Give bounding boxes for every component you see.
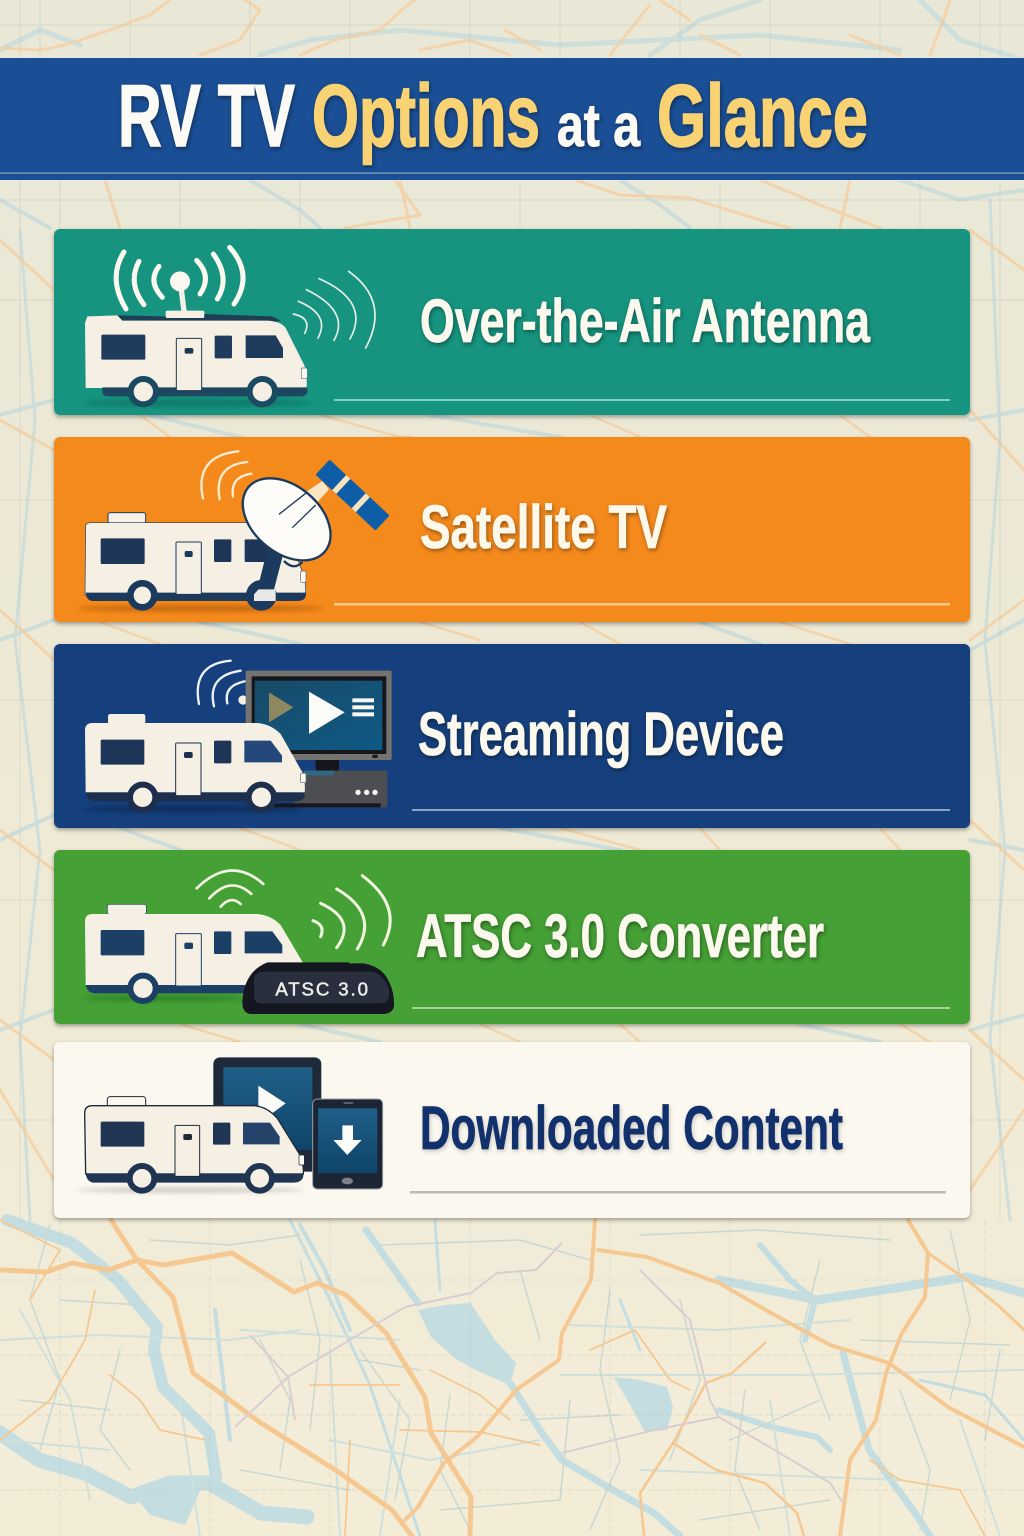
upper map: faded network	[0, 0, 1024, 1220]
title: Glance	[657, 66, 868, 165]
icon: converter box: ATSC 3.0	[275, 979, 368, 1000]
icon: RV with ATSC 3.0 box	[84, 871, 394, 1014]
icon: RV with tablet and phone	[77, 1057, 383, 1193]
panel: over-the-air antenna	[54, 229, 970, 415]
panel: streaming device	[54, 644, 970, 828]
label: Streaming Device	[418, 700, 784, 768]
panel: satellite TV	[54, 437, 970, 622]
lower map: lakes and rivers	[0, 1220, 1024, 1536]
title: Options	[312, 66, 540, 165]
title: at a	[557, 92, 641, 159]
lower map: roads	[0, 1220, 1024, 1536]
icon: RV with monitor and streaming box	[84, 661, 392, 813]
title banner	[0, 57, 1024, 181]
label: ATSC 3.0 Converter	[416, 902, 824, 970]
icon: RV with antenna and signal waves	[84, 247, 375, 407]
label: Downloaded Content	[420, 1094, 843, 1162]
label: Over-the-Air Antenna	[420, 287, 871, 355]
icon: RV with satellite dish	[77, 451, 390, 612]
title	[118, 66, 868, 165]
title: RV TV	[118, 66, 295, 165]
panel: downloaded content	[54, 1042, 970, 1218]
lower map: minor highways	[235, 1243, 843, 1503]
icon: converter box	[242, 962, 394, 1014]
panel: ATSC 3.0 converter	[54, 850, 970, 1024]
label: Satellite TV	[420, 493, 667, 561]
